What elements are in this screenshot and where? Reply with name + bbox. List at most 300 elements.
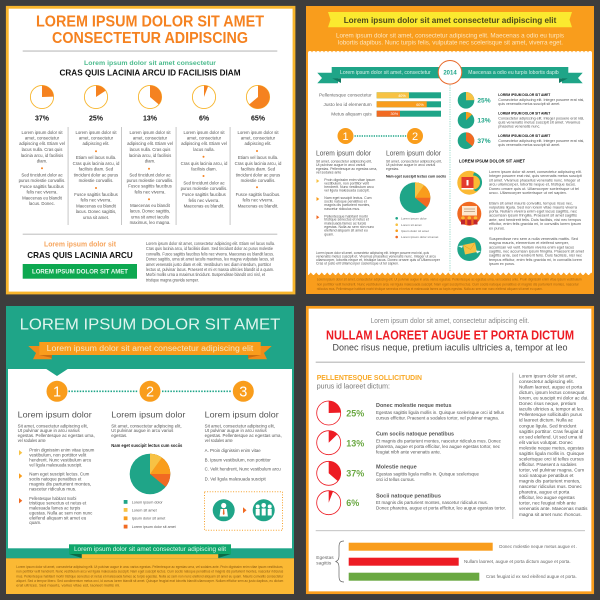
right text column: id laoreet dictum. Nulla ac — [519, 418, 574, 423]
bottom heading — [27, 242, 133, 260]
right text column: magna sit amet nunc rhoncus. — [519, 512, 582, 517]
text column 4: felis nec viverra. — [188, 198, 220, 203]
text column 1: lacus nulla. Cras quis — [22, 147, 62, 152]
bulleted list: hendrerit. Nunc vestibulum arcu — [324, 185, 374, 189]
text column 2: Fusce sagittis faucibus — [74, 192, 118, 197]
bulleted list: magnis dis parturient montes, — [29, 482, 91, 487]
right statistic rows: 13% — [477, 118, 491, 124]
text block 3: sagittis ante, sed hendrerit felis. Duis facilisis, nisi nec — [489, 254, 582, 258]
right statistic rows: phasellus venenatis nunc. — [498, 125, 540, 129]
stat row 37%: Egestas sagittis ligula mollis in. Quisque scelerisque — [376, 472, 479, 476]
text column 4: Cras quis lacinia arcu, id — [181, 161, 228, 166]
text block 1: unco. Ullamcorper scelerisque ut vel sapien. — [489, 191, 567, 195]
text column 5: Etiam vel lacus nulla. — [238, 155, 278, 160]
footer yellow text — [16, 565, 284, 587]
green bottom ribbon — [69, 544, 231, 558]
text column 1: lacus. Donec. — [29, 201, 55, 206]
lower paragraph: Cras ut justo elit Ullamcorper scelerisque ut tel sapien. — [316, 262, 399, 266]
bottom paragraph: amet venenatis justo diam et elit. Vestibulum nec diam interdum, porttitor — [146, 262, 271, 267]
text column 2: Maecenas eu blandit — [76, 203, 117, 208]
text block 1: sit amet. Vivamus phasellus venenatis nunc. Integer ut — [489, 178, 580, 182]
stat row 25% — [317, 401, 505, 425]
bulleted list: tristique senectus et netus et — [29, 501, 87, 506]
pie legend: Lorem ipsum dolor — [132, 499, 163, 504]
stat row 6%: Et magnis dis parturient montes, nascetur ridiculus mus. — [376, 500, 488, 505]
bulleted list: sociis natoque penatibus et — [29, 477, 82, 482]
footer orange text: ridiculus mus. Pellentesque habitant morbi tristique senectus et netus et malesuada fames ac turpis egestas. Nulla ac sem non nunc eleifend aliquam sit amet eu quam. — [317, 287, 543, 291]
pie: 37%: 37% — [35, 116, 50, 123]
right text column: lorem, eu suscipit mi dolor ac dui. — [519, 396, 589, 401]
bulleted list: Pellentesque habitant morbi — [324, 214, 368, 218]
text block 3: ipsum ex purus. — [489, 262, 515, 266]
bulleted list: eleifend aliquam sit amet eu — [29, 515, 87, 520]
text column 4: lacus nulla. — [193, 147, 215, 152]
green button: LOREM IPSUM DOLOR SIT AMET — [32, 269, 128, 276]
text column 5: Lorem ipsum dolor sit — [237, 130, 279, 135]
bulleted list: eleifend aliquam sit amet eu — [324, 229, 368, 233]
bulleted list: Nam eget suscipit lectus. Cum — [29, 472, 90, 477]
stat row 37%: orci id tellus cursus. — [376, 477, 415, 482]
bulleted list: magnis dis parturient montes, — [324, 203, 370, 207]
right text column: Donec risus neque, pretium — [519, 401, 576, 406]
numbered steps: 2 — [146, 384, 154, 400]
column two text: Ut pulvinar augue in arcu varius — [386, 163, 435, 167]
text column 3: Fusce sagittis faucibus — [128, 184, 172, 189]
text block 3: accumsan vel velit. Nullam viverra enim eget lacus — [489, 245, 574, 249]
step circles 1 and 2: 2 — [412, 131, 418, 143]
icon: calendar — [457, 171, 482, 195]
pie: 13% — [138, 85, 162, 123]
right text column: pharetra, augue et porta — [519, 490, 570, 495]
column one: vel sodales ante — [18, 438, 46, 443]
text column 4: Sed tincidunt dolor ac — [183, 180, 226, 186]
column three: Lorem ipsum dolor — [205, 410, 279, 420]
pie legend: Lorem ipsum dolor sit amet — [401, 235, 438, 239]
bulleted list: vel ligula malesuada suscipit. — [324, 189, 370, 193]
column one: Sit amet, consectetur adipiscing elit, — [18, 423, 88, 428]
stat row 37%: Molestie neque — [376, 465, 417, 471]
teal ribbon with year: Lorem ipsum dolor sit amet, consectetur — [340, 70, 431, 76]
stat row 37%: 37% — [346, 469, 364, 479]
text column 3: urna sit amet iaculis — [131, 214, 169, 220]
bottom paragraph: Lorem ipsum dolor sit amet, consectetur adipiscing elit. Etiam vel lacus nulla. — [146, 241, 275, 246]
column three: Sit amet, consectetur adipiscing elit, — [205, 423, 275, 428]
bulleted list: hendrerit. Nunc vestibulum arcu — [29, 458, 92, 462]
text block 2: Etiam sit amet mauris convallis, tempus risus nec, — [489, 201, 573, 205]
horizontal bar chart: Cras feugiat id ex sed eleifend augue et porta. — [486, 574, 577, 580]
column one text: Lorem ipsum dolor — [316, 148, 371, 157]
right text column: sagittis porttitor. Cras feugiat id — [519, 429, 584, 434]
section heading: PELLENTESQUE SOLLICITUDIN — [317, 373, 422, 382]
right text column: ex sed eleifend. Ut sed urna id — [519, 434, 583, 439]
yellow header banner: Lorem ipsum dolor sit amet consectetur adipiscing elit — [344, 15, 557, 25]
bottom heading: Lorem ipsum dolor sit — [44, 242, 117, 249]
yellow header banner — [328, 12, 572, 27]
text column 1: Maecenas eu blandit — [22, 195, 63, 200]
text column 3: Sed tincidunt dolor ac — [129, 172, 172, 177]
right statistic rows: Consectetur adipiscing elit. Integer posuere erat nisi, — [498, 139, 584, 143]
text column 5: Maecenas eu blandit. — [238, 203, 278, 208]
text column 2 — [73, 130, 120, 220]
bottom paragraph: convallis. Fusce sagittis faucibus felis nec viverra. Maecenas eu blandit lacus. — [146, 251, 274, 256]
bulleted list: quam. — [29, 520, 41, 525]
text column 2: urna sit amet. — [83, 215, 109, 220]
progress bars — [319, 92, 441, 117]
stat row 13%: Et magnis dis parturient montes, nascetur ridiculus mus. Donec — [376, 439, 502, 444]
text column 5: Fusce sagittis faucibus. — [236, 192, 280, 197]
pie legend: Lorem sit amet — [132, 508, 158, 512]
progress bars: 60% — [416, 103, 424, 107]
stat row 13%: feugiat nibh ante venenatis ante. — [376, 449, 441, 454]
column three: A. Proin dignissim enim vitae — [205, 448, 261, 453]
text column 5 — [235, 130, 282, 208]
footer yellow text: aliquet. Sed a tempor libero. Sed condimentum metus orci, id cursus lorem blandit sit amet. Quisque feugiat erat lobortis blandit ullamcorper. Nullam efficitur sem ac justo dapibus, eu dictum — [16, 579, 283, 583]
numbered steps — [46, 381, 254, 402]
horizontal bar chart: Donec molestie neque metus augue et . — [499, 544, 577, 550]
pie legend: Ipsum dolor sit amet — [401, 229, 429, 233]
right text column: socii natoque penatibus et — [519, 473, 574, 478]
text column 3: purus molestie convallis. — [127, 178, 173, 183]
progress bars: 40% — [398, 94, 406, 98]
right section heading: LOREM IPSUM DOLOR SIT AMET — [459, 158, 525, 163]
text column 3: lacus nulla. Cras quis — [130, 147, 170, 152]
column three: Ut pulvinar augue in arcu varius — [205, 428, 267, 433]
lower paragraph: venenatis metus suscipit et. Vivamus phasellus venenatis nunc. Integer ut arcu — [316, 254, 436, 258]
progress bars: Pellentesque consectetur — [319, 93, 372, 98]
footer yellow text: mus. Pellentesque habitant morbi tristique senectus et netus et malesuada fames ac turpis egestas. Nulla ac sem non nunc eleifend aliquam sit amet eu quam. Mauris convallis consectetur — [16, 574, 284, 578]
right text column: Nullam laoreet, augue et porta — [519, 385, 582, 390]
teal ribbon with year: 2014 — [443, 70, 457, 76]
icon: crowd and board — [457, 202, 481, 226]
pie: 6% — [192, 85, 216, 123]
right statistic rows: LOREM IPSUM DOLOR SIT AMET — [498, 93, 551, 97]
text block 1: Lorem ipsum dolor sit amet, consectetur adipiscing elit. — [489, 170, 582, 174]
bulleted list: vestibulum, non porttitor velit — [29, 453, 87, 458]
brace label: sagittis — [316, 561, 332, 567]
bulleted list: egestas. Nulla ac sem non nunc — [29, 510, 92, 515]
text column 4: facilisis diam. — [191, 167, 217, 172]
right text column: magnis dis parturient montes, — [519, 479, 580, 484]
text column 3: maximus, leo magna. — [130, 220, 170, 225]
column one: egestas. Pellentesque ac egestas urna, — [18, 433, 95, 438]
text column 1: adipiscing elit. Etiam vel — [19, 141, 65, 146]
bulleted list: tristique senectus et netus et — [324, 218, 369, 222]
right text column: sagittis ligula mollis in. Quisque — [519, 451, 585, 456]
column one: Lorem ipsum dolor — [18, 410, 92, 420]
text column 2: facilisis diam. Sed — [79, 167, 114, 172]
text column 2: molestie convallis. — [79, 178, 113, 183]
stat row 6% — [317, 491, 506, 515]
text column 2: Cras quis lacinia arcu, id — [73, 161, 120, 166]
column two text — [386, 148, 446, 178]
stat row 37% — [317, 461, 479, 485]
column two text: Lorem ipsum dolor — [386, 148, 441, 157]
stat row 6%: Socii natoque penatibus — [376, 493, 441, 499]
orange ribbon — [28, 342, 272, 359]
panel: top-left orange pie statistics — [7, 7, 294, 293]
pie chart — [130, 454, 170, 494]
title: LOREM IPSUM DOLOR SIT AMET — [20, 316, 281, 333]
column two: Ut pulvinar augue in arcu varius — [111, 428, 173, 433]
header intro text: Lorem ipsum dolor sit amet, consectetur adipiscing elit. Maecenas a odio eu turpis — [336, 34, 564, 40]
text block 3: magna mauris, elementum et eleifend semper, — [489, 241, 569, 245]
text column 5: adipiscing elit. — [244, 141, 272, 146]
subtitle: CRAS QUIS LACINIA ARCU ID FACILISIS DIAM — [60, 68, 241, 78]
column two text: egestas. — [386, 167, 399, 171]
bulleted list: sociis natoque penatibus et — [324, 200, 367, 204]
horizontal bar chart — [316, 541, 577, 582]
column three: D. Vel ligula malesuada suscipit — [205, 476, 267, 481]
text column 2: amet, consectetur — [79, 135, 114, 140]
bulleted list: malesuada fames ac turpis — [324, 221, 366, 225]
text column 1 — [19, 130, 65, 206]
column one: Ut pulvinar augue in arcu varius — [18, 428, 80, 433]
text block 3: Suspendisse nec sem a nulla venenatis mattis. Sed — [489, 237, 578, 241]
text block 2: ex purus. — [489, 226, 505, 230]
panel: bottom-left teal infographic — [6, 306, 294, 594]
text column 3: lacus. Donec sagittis, — [130, 209, 170, 214]
header text: Donec risus neque, pretium iaculis ultricies a, tempor at leo — [332, 342, 568, 352]
pie: 65% — [246, 85, 270, 123]
text column 2: Lorem ipsum dolor sit — [75, 130, 117, 135]
bottom paragraph: tristique magna gravida semper. — [146, 277, 199, 282]
lower paragraph: ullamcorper, lobortis neque et, tristique lacus. Donec ornare quis ut Ullamcorper — [316, 258, 441, 262]
progress bars: 30% — [390, 112, 399, 116]
pie legend: Lorem sit amet — [401, 223, 422, 227]
icon: envelope — [457, 237, 481, 261]
progress bars: Metus aliquam quis — [331, 112, 372, 116]
subtitle — [60, 60, 241, 78]
panel: bottom-right red report — [307, 307, 593, 593]
stat row 13%: 13% — [346, 438, 364, 448]
pie chart — [400, 182, 430, 213]
bulleted list — [316, 178, 375, 237]
text column 5: felis nec viverra. — [242, 198, 274, 203]
text column 4: Fusce sagittis faucibus — [182, 192, 226, 197]
stat row 6%: Donec pharetra, augue et porta efficitur, leo augue egestas tortor. — [376, 505, 506, 510]
text column 1: lacinia arcu, id facilisis — [21, 153, 63, 158]
text column 1: amet, consectetur — [25, 135, 60, 140]
right text column: nascetur ridiculus mus. Donec — [519, 484, 582, 489]
numbered steps: 1 — [53, 384, 61, 400]
text block 3 — [489, 237, 584, 266]
text block 2: porta. Nullam viverra enim eget lacus sagittis, nec — [489, 210, 577, 214]
text block 3: sagittis, nec accumsan ipsum fringilla. Praesent sit amet — [489, 249, 584, 253]
step circles 1 and 2 — [338, 128, 423, 144]
pie: 25% — [84, 85, 108, 123]
right text column: consectetur adipiscing elit. — [519, 379, 574, 384]
text column 3: Maecenas eu blandit — [130, 203, 171, 208]
text block 1: Integer posuere erat nisi, quis venenatis metus suscipit — [489, 174, 582, 178]
text column 1: Sed tincidunt dolor ac — [21, 173, 64, 178]
text column 1: diam. — [37, 158, 47, 163]
orange ribbon: Lorem ipsum dolor sit amet consectetur adipiscing elit — [47, 344, 254, 353]
pie: 65%: 65% — [251, 116, 266, 123]
text column 5: tincidunt dolor ac purus — [236, 172, 280, 177]
text column 3: diam. — [145, 158, 155, 163]
text block 2: accumsan ipsum fringilla. Praesent sit amet sagittis — [489, 214, 577, 218]
pie: 13%: 13% — [143, 116, 158, 123]
green bottom ribbon: Lorem ipsum dolor sit amet consectetur adipiscing elit — [74, 547, 226, 553]
panel: top-right orange and teal infographic — [306, 6, 594, 294]
text column 3: Lorem ipsum dolor sit — [129, 130, 171, 135]
right statistic rows: quis venenatis metus suscipit sit amet. — [498, 143, 560, 147]
column two: egestas. — [111, 433, 127, 438]
subtitle: Lorem ipsum dolor sit amet consectetur — [84, 60, 216, 67]
right statistic rows: LOREM IPSUM DOLOR SIT AMET — [498, 134, 551, 138]
right text column: molestie neque metus, egestas — [519, 445, 585, 450]
lower paragraph — [316, 251, 441, 266]
bulleted list: vestibulum, non porttitor velit — [324, 181, 369, 185]
bottom paragraph — [146, 241, 275, 282]
right statistic rows: LOREM IPSUM DOLOR SIT AMET — [498, 111, 551, 115]
text column 2: Etiam vel lacus nulla. — [76, 155, 116, 160]
column one text: vel sodales ante — [316, 171, 341, 175]
bulleted list: Pellentesque habitant morbi — [29, 496, 76, 501]
bottom paragraph: Donec sagittis, urna sit amet iaculis maximus, leo magna vulputate lacus, sit — [146, 257, 275, 262]
right text column: tortor, vel pulvinar magna. Cum — [519, 468, 584, 472]
column three: C. Velit hendrerit, Nunc vestibulum arcu — [205, 467, 281, 472]
header text — [326, 318, 574, 352]
right text column: scelerisque orci id tellus cursus — [519, 456, 585, 462]
pie legend — [395, 216, 438, 239]
text block 2: ante, sed hendrerit felis. Duis facilisis, nisi nec tempus — [489, 218, 581, 222]
text block 2: efficitur, enim felis gravida mi, in convallis lorem ipsum — [489, 222, 581, 226]
column two — [111, 410, 185, 448]
right text column: dictum, ipsum lectus consequat — [519, 390, 585, 395]
icon: arrow — [243, 507, 246, 513]
text column 1: Lorem ipsum dolor sit — [21, 130, 63, 135]
header intro text: lobortis dapibus. Nunc turpis felis, vulputate nec scelerisque sit amet, viverra eget. — [338, 41, 563, 47]
text column 3: amet, consectetur — [133, 135, 168, 140]
column one text — [316, 148, 377, 175]
column three: B. Ipsum vestibulum, non porttitor — [205, 457, 271, 462]
stat row 13%: Cum sociis natoque penatibus — [376, 432, 454, 438]
text column 5: molestie convallis. — [241, 178, 275, 183]
bottom paragraph: lectus ut, pulvinar lacus. Praesent et mi et massa ultricies blandit id a quam. — [146, 267, 274, 272]
column two: Lorem ipsum dolor — [111, 410, 185, 420]
text column 5: facilisis diam. Sed — [241, 167, 276, 172]
section heading — [317, 373, 422, 391]
bulleted list — [19, 448, 95, 525]
column one text: egestas. Pellentesque ac egestas urna, — [316, 167, 377, 171]
pie legend: Lorem ipsum dolor sit amet — [132, 524, 177, 529]
right text column: venenatis ante. Maecenas mattis — [519, 506, 588, 511]
text column 1: felis nec viverra. — [26, 190, 58, 195]
stat row 25%: 25% — [346, 408, 364, 418]
text column 5: Cras quis lacinia arcu, id — [235, 161, 282, 166]
bottom paragraph: Morbi mollis urna a maximus tincidunt. Suspendisse blandit orci nisl, et — [146, 272, 266, 277]
footer yellow text: Lorem ipsum dolor sit amet, consectetur adipiscing elit. Ut pulvinar augue in arcu varius egestas. Pellentesque ac egestas urna, vel sodales ante. Proin dignissim enim vitae ipsum vestibulum, — [16, 565, 283, 569]
numbered steps: 3 — [239, 384, 247, 400]
footer yellow text: erat ultrices. Sed mauris, varius vitae est, laoreet mollis mi. — [16, 583, 120, 587]
column two text: Nam eget suscipit lectus cum sociis — [386, 174, 446, 178]
text column 3: adipiscing elit. Etiam vel — [127, 141, 173, 146]
right statistic rows: Consectetur adipiscing elit. Integer posuere erat nisi, — [498, 98, 584, 102]
right statistic rows: quis venenatis metus suscipit sit amet. Vivamus — [498, 120, 581, 124]
bulleted list: quam. — [324, 233, 334, 237]
bulleted list: Proin dignissim enim vitae ipsum — [29, 448, 95, 452]
text column 4: Maecenas eu blandit. — [184, 204, 224, 209]
text column 2: lacus. Donec sagittis, — [76, 209, 116, 214]
teal ribbon with year: Maecenas a odio eu turpis lobortis dapib — [468, 70, 559, 76]
column one — [18, 410, 95, 443]
progress bars: Justo leo id elementum — [323, 102, 372, 107]
bulleted list: nascetur ridiculus mus. — [29, 486, 76, 491]
text column 1: purus molestie convallis. — [19, 178, 65, 183]
footer orange text — [317, 278, 582, 291]
stat row 13%: pharetra, augue et porta efficitur, leo augue egestas tortor, nec — [376, 444, 501, 449]
header text: Lorem ipsum dolor sit amet, consectetur adipiscing elit. — [371, 318, 529, 325]
teal ribbon with year — [317, 61, 583, 84]
column two text: Sit amet, consectetur adipiscing elit, — [386, 159, 442, 163]
header intro text — [336, 34, 564, 47]
bulleted list: vel ligula malesuada suscipit. — [29, 462, 82, 467]
text column 2: tincidunt dolor ac purus — [74, 172, 118, 177]
title — [36, 14, 264, 47]
right text column: iaculis ultricies a, tempor at leo. — [519, 407, 584, 412]
text block 3: tempus efficitur, enim felis gravida mi, in convallis lorem — [489, 258, 582, 262]
column three: egestas. Pellentesque ac egestas urna, — [205, 433, 282, 438]
stat row 25%: cursus efficitur. Praesent a sodales tortor, vel pulvinar magna. — [376, 415, 499, 420]
footer orange text: non porttitor velit hendrerit. Nunc vestibulum arcu vel ligula malesuada suscipit. Nam eget suscipit lectus. Cum sociis natoque penatibus et magnis dis parturient montes, nascetur — [317, 282, 579, 286]
text column 3: felis nec viverra. — [134, 189, 166, 194]
text column 2: felis nec viverra. — [80, 198, 112, 203]
bottom heading: CRAS QUIS LACINIA ARCU — [27, 250, 133, 260]
text column 4: adipiscing elit. Etiam vel — [181, 141, 227, 146]
column two: Nam eget suscipit lectus cum sociis — [111, 443, 183, 448]
text block 2: vulputate ligula. Sed non lorem vitae mauris viverra — [489, 205, 578, 209]
pie legend: Ipsum dolor sit amet — [132, 516, 166, 521]
pie: 37% — [30, 85, 54, 123]
text column 4: amet, consectetur — [187, 135, 222, 140]
right statistic rows — [458, 92, 584, 149]
right text column: efficitur, leo augue egestas — [519, 495, 575, 500]
footer yellow text: non porttitor velit hendrerit. Nunc vestibulum arcu vel ligula malesuada suscipit. Nam eget suscipit lectus. Cum sociis natoque penatibus et magnis dis parturient montes, nascetur ridiculus — [16, 570, 283, 574]
text column 4: purus molestie convallis. — [181, 186, 227, 191]
brace label: Egestas — [316, 555, 334, 561]
text block 1 — [489, 170, 582, 195]
bulleted list: malesuada fames ac turpis — [29, 506, 80, 511]
text column 3: lacinia arcu, id facilisis — [129, 153, 171, 158]
green button — [23, 264, 137, 279]
lower paragraph: Lorem ipsum dolor sit amet, consectetur adipiscing elit. Integer posuere erat nisi, quis — [316, 251, 429, 255]
icon: person — [213, 499, 235, 521]
stat row 25%: Donec molestie neque metus — [376, 403, 452, 409]
right statistic rows: Consectetur adipiscing elit. Integer posuere erat nisi, — [498, 116, 584, 120]
column three: vel sodales ante — [205, 438, 233, 443]
text column 2: adipiscing elit. — [82, 141, 110, 146]
bulleted list: Proin dignissim enim vitae ipsum — [324, 178, 375, 182]
pie legend — [124, 499, 177, 529]
column one text: Ut pulvinar augue in arcu varius — [316, 163, 365, 167]
section heading: purus id laoreet dictum: — [317, 382, 390, 391]
bottom paragraph: Cras quis lacinia arcu, id facilisis diam. Sed tincidunt dolor ac purus molestie — [146, 246, 273, 251]
pie: 25%: 25% — [89, 116, 104, 123]
column one text: Sit amet, consectetur adipiscing elit, — [316, 159, 372, 163]
right text column — [519, 374, 589, 517]
horizontal bar chart: Nullam laoreet, augue et porta dictum augue et porta. — [464, 559, 571, 565]
title: CONSECTETUR ADIPISCING — [52, 30, 248, 47]
right statistic rows: quis venenatis metus suscipit sit amet. — [498, 102, 560, 106]
stat row 6%: 6% — [346, 498, 359, 508]
text column 4 — [181, 130, 228, 209]
icon: team — [253, 499, 275, 521]
text block 1: Donec ornare quis ut. Ullamcorper scelerisque ut tel — [489, 187, 579, 191]
text column 3 — [127, 130, 173, 225]
right text column: elit varius volutpat. Donec — [519, 440, 573, 445]
right text column: congue ligula. Sed tincidunt — [519, 423, 577, 428]
